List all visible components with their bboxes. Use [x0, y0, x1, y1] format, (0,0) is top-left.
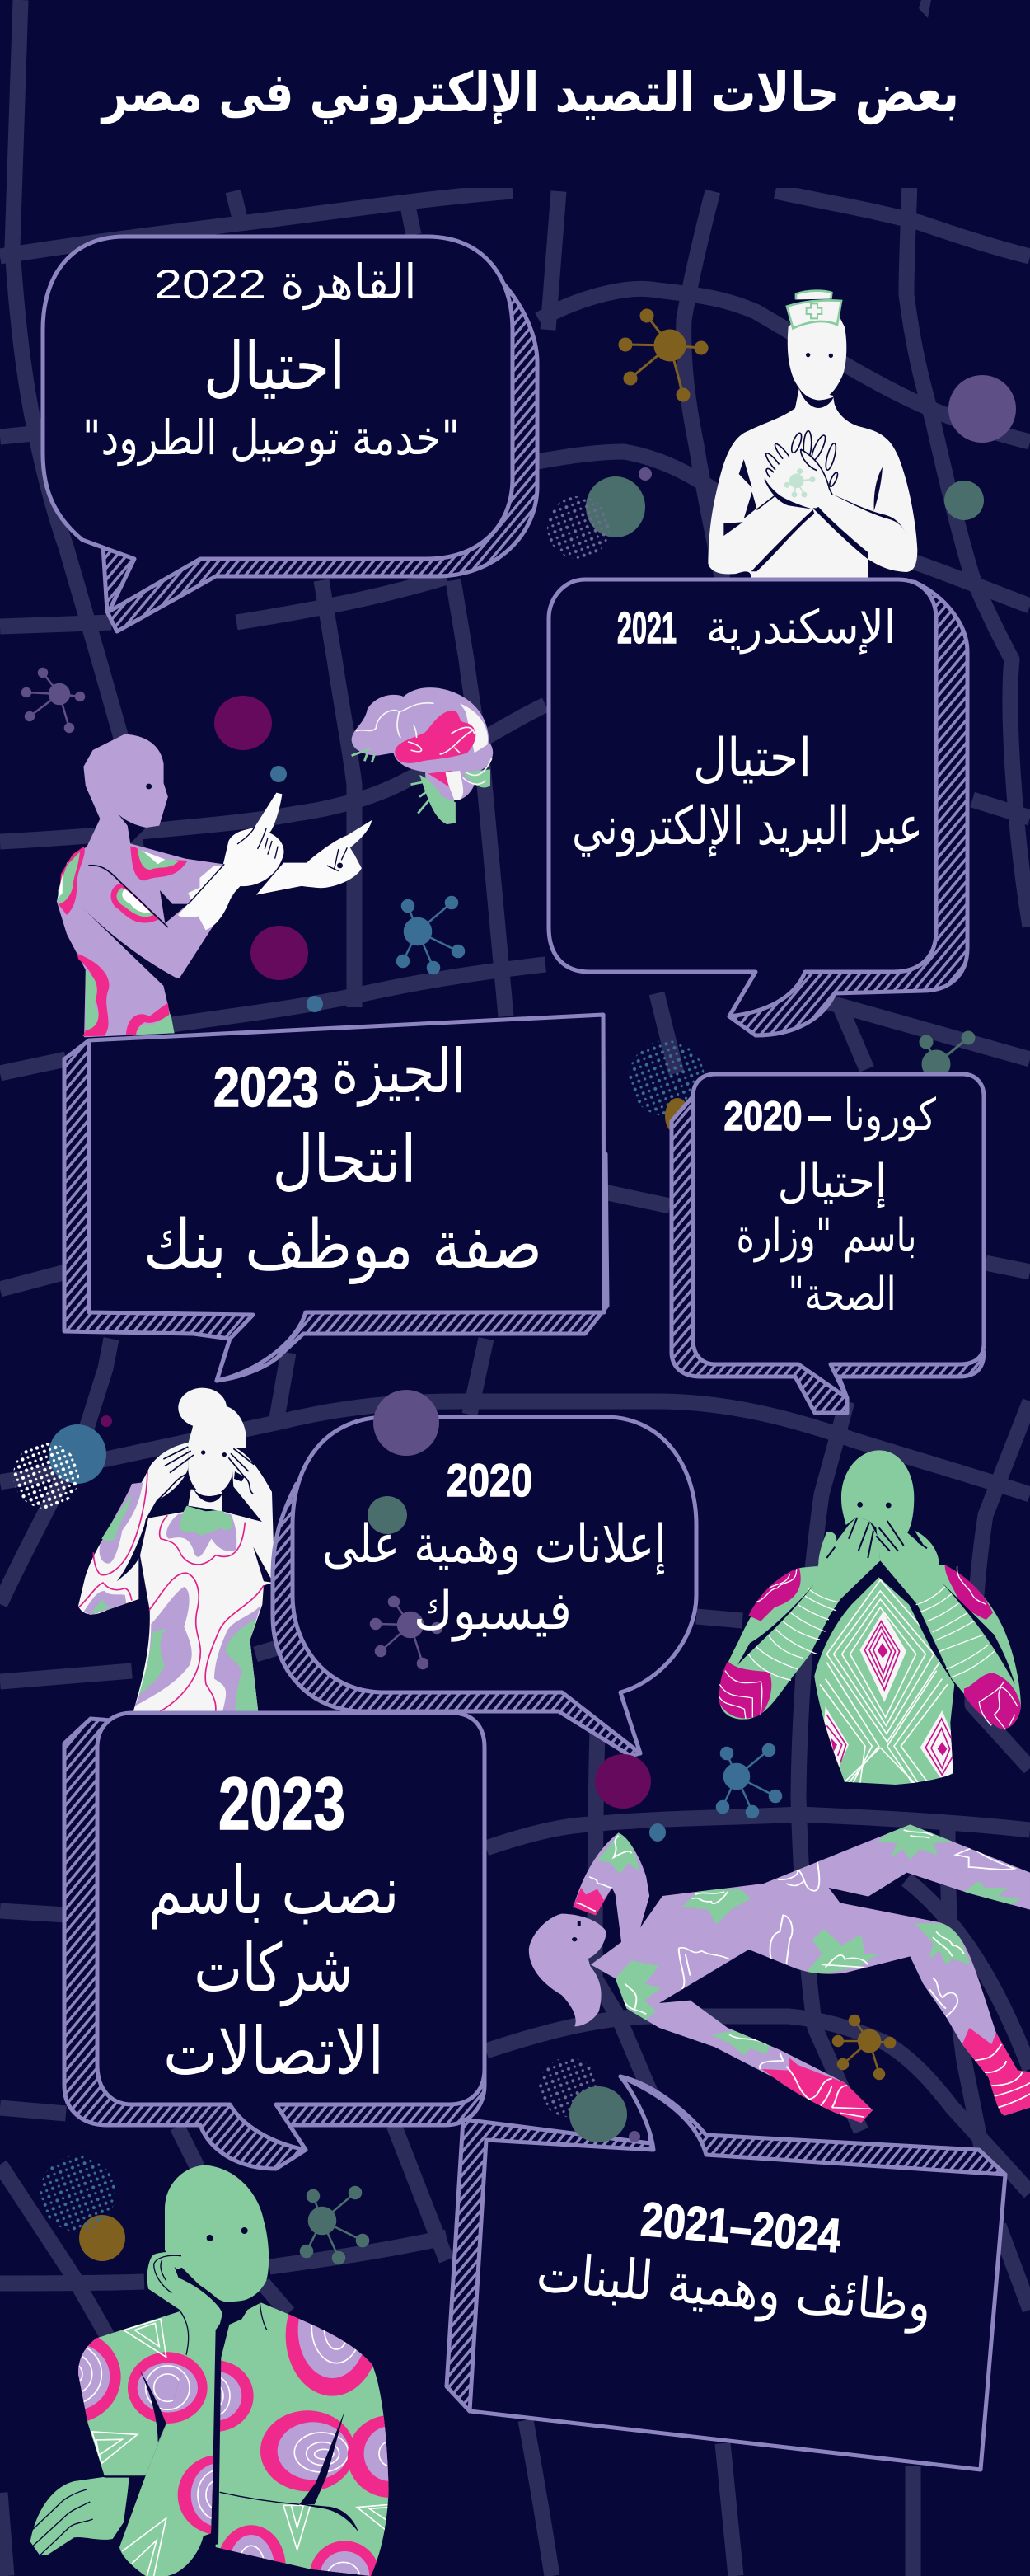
bubble: Corona 2020 [672, 1074, 984, 1413]
molecule: blue center [397, 897, 464, 974]
dash [808, 1116, 831, 1121]
line three: الاتصالات [163, 2013, 384, 2090]
hair [187, 1406, 246, 1448]
rings on right jacket [220, 2315, 389, 2576]
bubble face [97, 1713, 485, 2150]
description line two: فيسبوك [414, 1581, 572, 1642]
right jacket [216, 2302, 389, 2576]
molecule: purple in bubble [371, 1597, 442, 1668]
figure: nurse with crossed arms [708, 291, 917, 578]
bubble face [470, 2076, 1005, 2470]
cap [787, 291, 841, 328]
seam wedge [160, 890, 188, 923]
blob: teal [586, 476, 645, 537]
lower left diamond [822, 1706, 849, 1770]
neck [188, 1490, 222, 1511]
torso shadow marks [723, 459, 907, 571]
roots [352, 748, 434, 814]
left arm magenta upper [748, 1568, 801, 1621]
eyes [857, 1502, 892, 1508]
bubble shadow [273, 1484, 640, 1756]
hand and forearm overlay [769, 449, 832, 509]
body [708, 387, 917, 578]
bubble: 2021-2024 jobs [447, 2076, 1005, 2470]
head [788, 313, 846, 400]
blob: small purple lower [629, 2131, 640, 2142]
chin shadow [194, 1490, 222, 1502]
year: 2021 [617, 603, 677, 653]
cuff lavender [84, 1591, 126, 1615]
brain [352, 687, 493, 824]
dress mint left [138, 1628, 167, 1696]
resting finger lines [31, 2489, 93, 2555]
description line one: إعلانات وهمية على [322, 1514, 667, 1575]
torso pattern [820, 1580, 948, 1786]
left arm [78, 1443, 188, 1615]
right arm stripes [916, 1587, 995, 1677]
finger lines [826, 1518, 927, 1558]
molecule: blue right [717, 1744, 781, 1818]
right arm magenta upper [945, 1565, 993, 1620]
garment seam [88, 866, 168, 927]
cerebellum [463, 769, 490, 787]
eyes [572, 1921, 581, 1941]
pointing arm [256, 820, 372, 895]
forearm [119, 2325, 222, 2576]
dress mint right [225, 1618, 258, 1712]
eyes [207, 2227, 248, 2241]
face [188, 1443, 233, 1496]
hand lines [158, 1447, 254, 1499]
eye [146, 784, 152, 789]
raised arm [573, 1832, 649, 1945]
dress lavender right [214, 1605, 261, 1712]
garment wedge [82, 907, 176, 986]
cheek hand [147, 2252, 222, 2330]
molecule: brown lower right [833, 2015, 895, 2079]
line one: نصب باسم [148, 1852, 399, 1930]
torso [814, 1577, 954, 1785]
description: صفة موظف بنك [143, 1206, 542, 1284]
head [841, 1450, 914, 1536]
hand outline lines [105, 2255, 299, 2504]
bubble: 2023 telecom [64, 1713, 485, 2169]
blob: blue left [49, 1424, 106, 1484]
bubble face [89, 1015, 604, 1381]
molecule: brown [620, 310, 707, 401]
raised arm [178, 793, 283, 930]
right arm magenta lower [964, 1673, 1021, 1729]
city: الجيزة [331, 1036, 466, 1107]
head [165, 2165, 269, 2302]
cuff mint [91, 1599, 111, 1614]
arm seams [737, 1566, 1015, 1684]
right arm [231, 1447, 274, 1583]
knuckle [337, 863, 343, 868]
blob: plum under tail [595, 1754, 651, 1809]
top chest patch [130, 847, 188, 880]
arm pattern [100, 1482, 143, 1564]
bubble face [43, 237, 513, 612]
bubble: Giza 2023 [64, 1015, 607, 1381]
blob: small purple [639, 467, 652, 481]
year: 2020 [723, 1093, 803, 1139]
molecule: teal behind card [920, 1032, 974, 1077]
pink lobe [395, 711, 475, 763]
dots: blue cluster [629, 1040, 705, 1116]
white highlight [460, 703, 488, 753]
bubble: Cairo 2022 [43, 237, 537, 631]
bun [178, 1388, 227, 1428]
mid patch [111, 884, 159, 923]
dots: grey cluster lower [539, 2058, 598, 2117]
blob: brown hidden [665, 1098, 690, 1134]
line two: باسم "وزارة [737, 1209, 916, 1263]
blob: teal in bubble [368, 1496, 407, 1534]
year: 2022 [154, 261, 266, 307]
blob: small blue [270, 766, 287, 782]
bubble face [293, 1417, 696, 1753]
dress lavender left [134, 1587, 192, 1706]
city: الإسكندرية [705, 601, 897, 655]
sleeve specks [188, 866, 222, 900]
blob: small blue [649, 1823, 666, 1842]
left arm magenta lower [719, 1661, 771, 1718]
eyes [201, 1450, 227, 1457]
right hand [876, 1519, 942, 1605]
type: انتحال [272, 1121, 417, 1198]
forearm pattern [122, 2356, 213, 2576]
left sleeve [78, 2311, 190, 2475]
head and hair [529, 1914, 606, 2026]
blob: small plum [101, 1415, 112, 1427]
city: كورونا [844, 1089, 936, 1141]
arm squiggles [576, 1836, 631, 1911]
folds [356, 703, 492, 784]
description: عبر البريد الإلكتروني [572, 796, 923, 857]
molecule on hands [784, 469, 815, 497]
torso and limbs [591, 1824, 1030, 2123]
figure: reclining lavender person [529, 1824, 1030, 2123]
resting hand [30, 2477, 129, 2555]
hands [813, 1517, 880, 1599]
bubble shadow [64, 1719, 485, 2169]
blob: purple right [948, 375, 1016, 443]
hand lines [188, 827, 347, 904]
dots: blue cluster lower [40, 2156, 115, 2231]
type: احتيال [693, 728, 812, 789]
type: احتيال [204, 328, 345, 405]
blob: purple on bubble [373, 1390, 439, 1456]
arm star patch [597, 1832, 639, 1874]
left arm [719, 1566, 840, 1720]
collar mint [180, 1506, 232, 1536]
hand outline [756, 449, 832, 509]
bubble face [693, 1074, 984, 1398]
bubble shadow [577, 582, 967, 1035]
top accent segment [919, 0, 931, 18]
stem pink [428, 771, 452, 787]
type: إحتيال [778, 1155, 887, 1209]
body [57, 734, 235, 1037]
squiggles [719, 1566, 1018, 1729]
molecule: purple top left [22, 669, 84, 732]
city: القاهرة [280, 254, 417, 311]
molecule: teal lower [301, 2187, 368, 2264]
eyes [806, 353, 833, 358]
lobes [352, 687, 493, 824]
description: "خدمة توصيل الطرود" [82, 410, 460, 467]
line two: شركات [194, 1930, 353, 2007]
torso [133, 1511, 274, 1712]
center diamond [859, 1612, 906, 1702]
figure: green person covering mouth [719, 1450, 1021, 1786]
mouth gap [118, 814, 147, 843]
figure: woman in white covering eyes [78, 1388, 274, 1712]
left arm stripes [748, 1588, 838, 1680]
blob: teal lower [569, 2086, 627, 2142]
sleeve and jacket wedges [125, 2267, 358, 2532]
arm mint [101, 1494, 132, 1541]
lower right diamond [920, 1710, 954, 1781]
side gaps [117, 1518, 274, 1583]
chin shadow [798, 387, 834, 408]
collar lavender [166, 1514, 236, 1557]
stem white [446, 771, 463, 800]
lower right patch [126, 1003, 175, 1035]
right arm [917, 1565, 1021, 1729]
year: 2023 [213, 1056, 319, 1119]
bubble face [549, 579, 936, 1016]
rings on left sleeve [78, 2318, 186, 2465]
blob: brown lower [79, 2215, 125, 2261]
description: وظائف وهمية للبنات [534, 2241, 934, 2335]
bubble: Facebook 2020 [273, 1417, 696, 1756]
mint and pink patches [616, 1824, 1030, 2123]
figure: pointing lavender person [57, 734, 372, 1037]
wrist band [573, 1888, 612, 1915]
years: 2021–2024 [639, 2193, 843, 2263]
bubble shadow [64, 1040, 607, 1381]
bubble: Alexandria 2021 [549, 579, 967, 1035]
dots: white cluster [13, 1443, 79, 1509]
year: 2023 [218, 1763, 345, 1846]
year: 2020 [447, 1454, 532, 1506]
blob: plum lower [250, 926, 308, 980]
blob: plum upper [214, 696, 272, 750]
thumb shadow [234, 1471, 245, 1481]
pink contour lines [79, 1471, 264, 1712]
blob: teal right [944, 481, 984, 520]
lower left patch [77, 954, 109, 1036]
dots: grey cluster [547, 496, 610, 559]
line three: الصحة" [788, 1268, 897, 1321]
figure: thinking green person [30, 2165, 389, 2576]
neck shadow [212, 2297, 255, 2545]
bubble shadow [103, 243, 537, 631]
shoulder patch [58, 847, 85, 915]
title band mask [33, 0, 1030, 188]
blob: small blue lower [307, 996, 323, 1012]
bubble shadow [672, 1096, 984, 1413]
bubble shadow [447, 2076, 1005, 2411]
fingers [764, 430, 839, 487]
mint stem [419, 775, 456, 824]
